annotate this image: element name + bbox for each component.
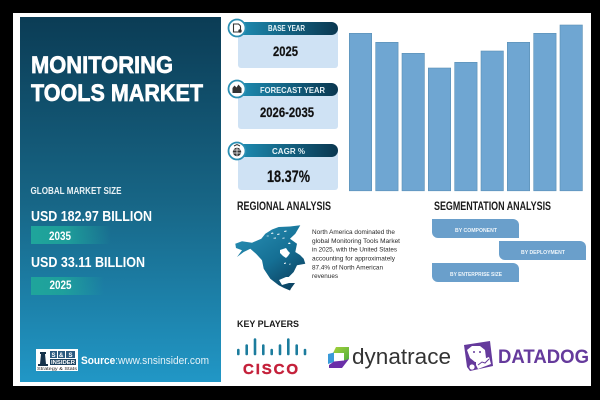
card: forecast year <box>228 80 338 129</box>
text: regional summary: revenues <box>312 273 339 280</box>
logo: SNS Insider: S <box>52 353 56 359</box>
icon: chart <box>228 80 246 98</box>
title: MONITORING <box>31 52 173 79</box>
text: regional summary: North America dominated the <box>312 229 395 236</box>
logo: SNS Insider <box>36 349 78 371</box>
segment: by enterprise size: BY ENTERPRISE SIZE <box>450 272 502 278</box>
card: base year <box>228 20 338 68</box>
text: regional summary: 87.4% of North American <box>312 264 383 272</box>
panel: market summary <box>20 17 221 382</box>
segment: by component <box>432 219 519 238</box>
year tag: 2025: 2025 <box>50 278 72 292</box>
bar chart <box>349 25 582 191</box>
logo: Cisco: CISCO <box>243 361 298 378</box>
icon: document <box>228 20 246 36</box>
Hudson Bay and islands <box>266 230 290 264</box>
logo: SNS Insider: INSIDER <box>51 360 75 366</box>
card: CAGR: 18.37% <box>267 168 310 186</box>
segment: by deployment <box>499 241 586 260</box>
logo: Datadog: DATADOG <box>498 346 589 368</box>
card: forecast year: FORECAST YEAR <box>260 86 325 95</box>
card: CAGR: CAGR % <box>272 147 305 156</box>
year tag: 2035: 2035 <box>49 229 71 243</box>
text: regional summary: in 2025, with the United States <box>312 246 398 254</box>
logo: SNS Insider: S <box>68 353 73 359</box>
map: North America <box>235 225 305 290</box>
logo: SNS Insider: Strategy & Stats <box>37 366 78 371</box>
logo: SNS Insider: & <box>59 353 64 359</box>
year tag: 2035 <box>31 226 111 244</box>
heading: segmentation analysis: SEGMENTATION ANALYSIS <box>434 201 551 213</box>
text: regional summary: global Monitoring Tools Market <box>312 238 400 245</box>
logo: Cisco <box>238 340 305 378</box>
title <box>31 52 203 107</box>
title: TOOLS MARKET <box>31 80 203 107</box>
text: regional summary <box>312 229 400 280</box>
segment: by enterprise size <box>432 263 519 282</box>
card: CAGR <box>228 142 338 190</box>
heading: key players: KEY PLAYERS <box>237 319 299 330</box>
text: regional summary: accounting for approximately <box>312 256 396 262</box>
card: base year: BASE YEAR <box>268 24 305 33</box>
year tag: 2025 <box>31 277 104 295</box>
value: 2035 market size: USD 182.97 BILLION <box>31 208 152 225</box>
logo: Datadog <box>464 341 589 371</box>
card: forecast year: 2026-2035 <box>260 104 314 120</box>
source line: Source:www.snsinsider.com <box>81 355 209 367</box>
label: global market size: GLOBAL MARKET SIZE <box>30 186 122 197</box>
segment: by component: BY COMPONENT <box>455 228 498 234</box>
segment: by deployment: BY DEPLOYMENT <box>521 250 566 256</box>
icon: growth globe <box>228 142 246 160</box>
card: base year: 2025 <box>273 43 298 59</box>
logo: Dynatrace: dynatrace <box>352 344 451 369</box>
value: 2025 market size: USD 33.11 BILLION <box>31 254 145 271</box>
heading: regional analysis: REGIONAL ANALYSIS <box>237 201 331 213</box>
